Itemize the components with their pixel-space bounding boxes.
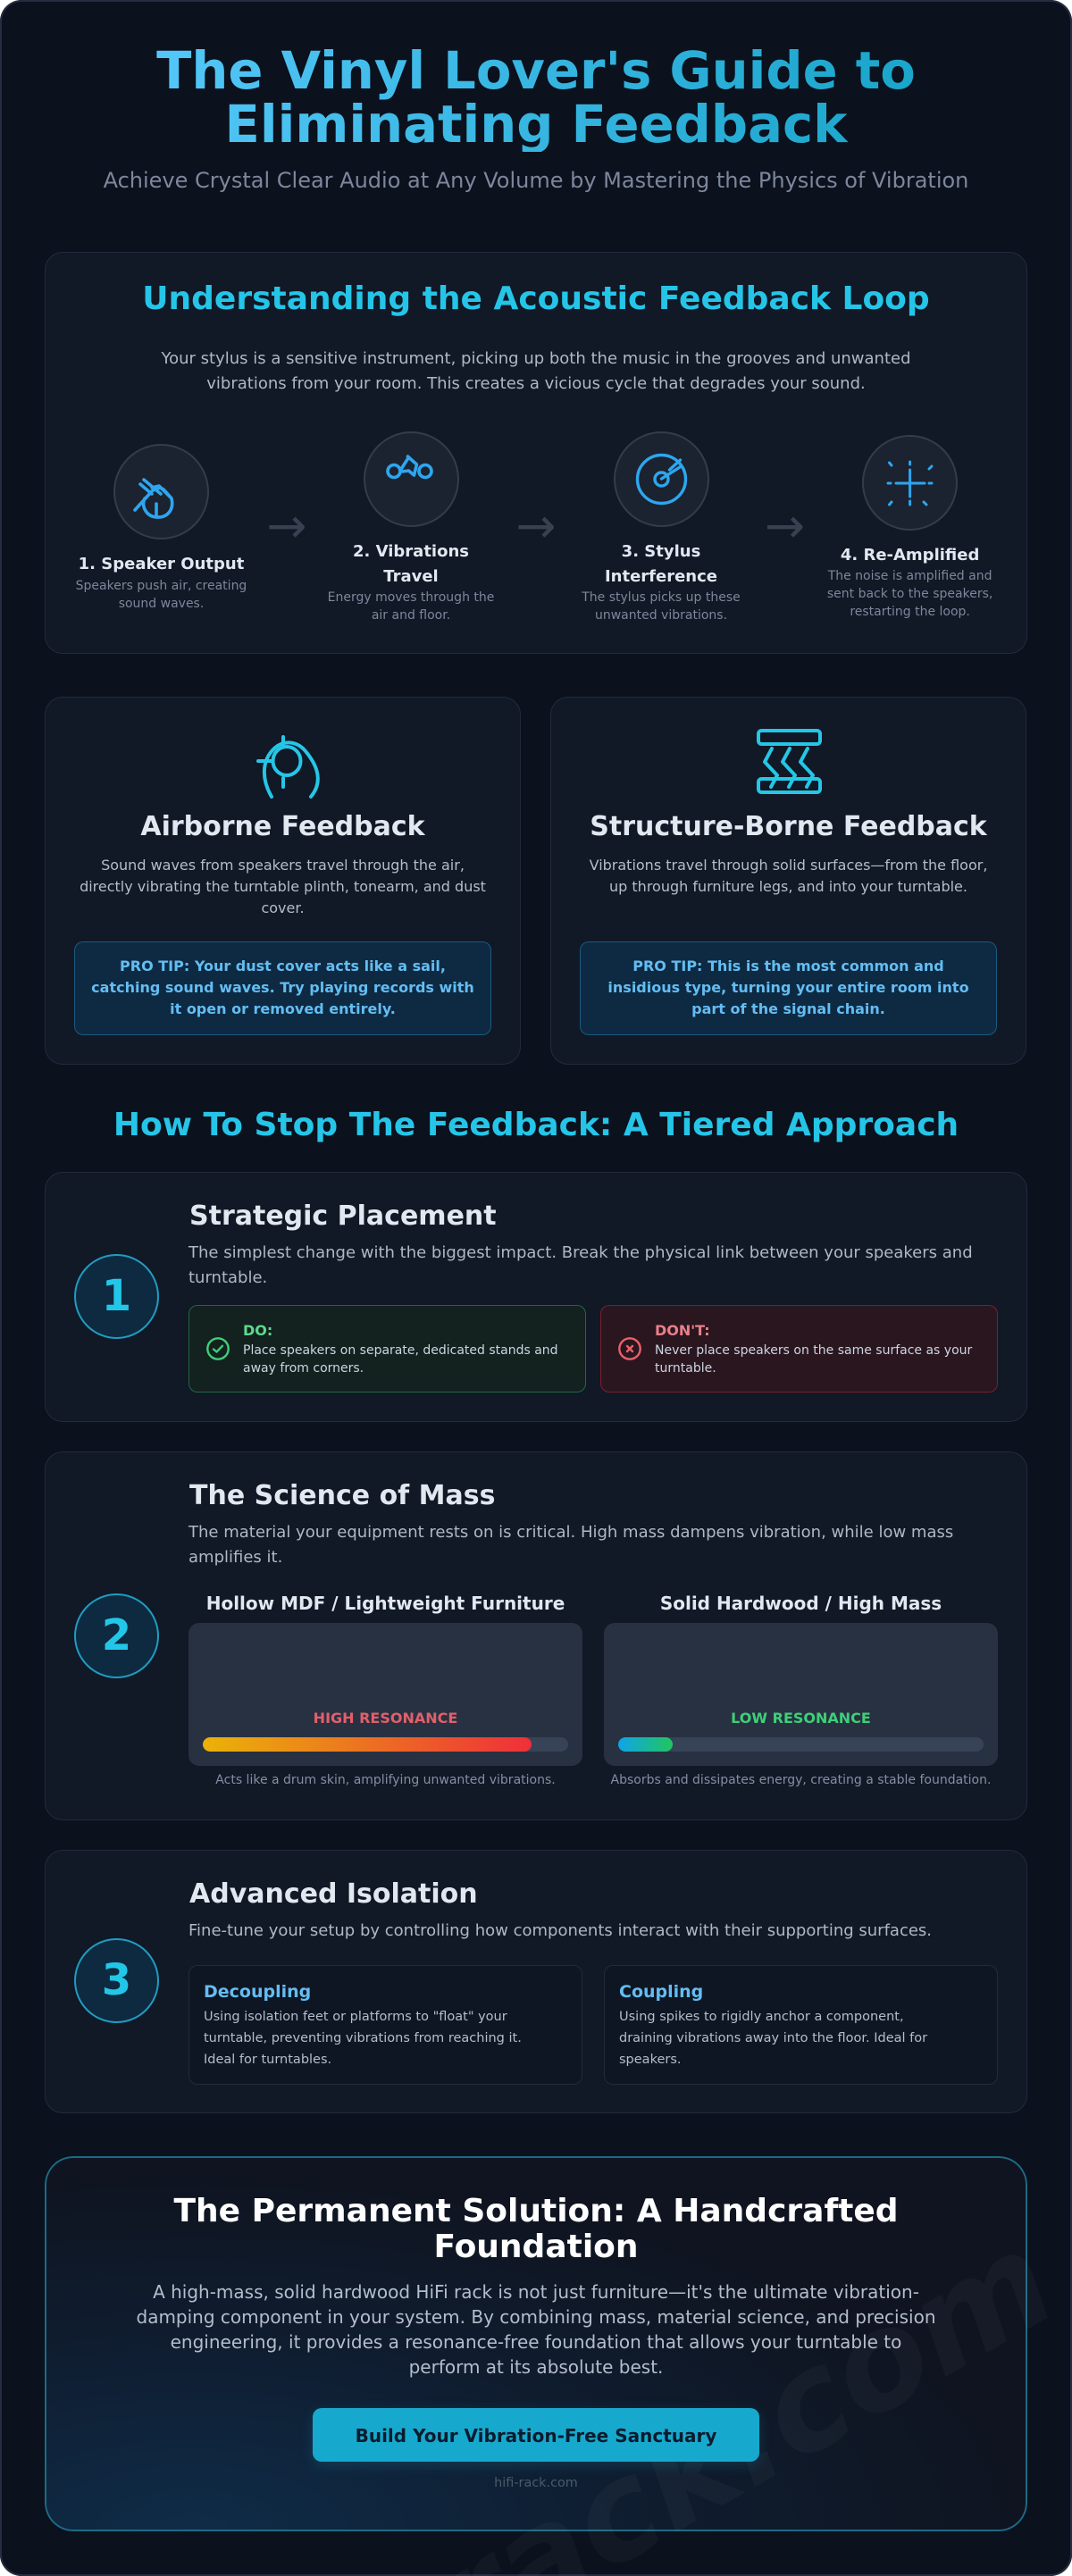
intro text	[161, 349, 911, 393]
pro tip callout: catching sound waves. Try playing records with	[91, 979, 474, 996]
icon: check	[206, 1337, 230, 1360]
do text: Place speakers on separate, dedicated stands and	[243, 1343, 558, 1358]
description: cover.	[261, 899, 305, 916]
pro tip callout: PRO TIP: This is the most common and	[632, 958, 944, 974]
step title: 2. Vibrations	[353, 541, 469, 561]
tier description: The simplest change with the biggest impact. Break the physical link between your speakers and	[188, 1243, 973, 1261]
card: decoupling: Ideal for turntables.	[204, 2053, 331, 2067]
comparison: solid hardwood	[604, 1593, 998, 1787]
icon: airborne waves	[256, 735, 320, 799]
do card	[188, 1305, 586, 1393]
tier number 3	[74, 1938, 159, 2023]
step description	[827, 569, 992, 619]
icon: amplification burst	[886, 461, 933, 506]
step title: Travel	[383, 566, 439, 586]
description: up through furniture legs, and into your turntable.	[609, 877, 967, 895]
tier title: The Science of Mass	[189, 1480, 495, 1511]
comparison: hollow MDF	[188, 1593, 582, 1787]
panel: tier 3 advanced isolation	[45, 1850, 1027, 2113]
panel: tier 1 strategic placement	[45, 1172, 1027, 1422]
step description: The noise is amplified and	[828, 569, 992, 583]
pro tip callout: part of the signal chain.	[691, 1000, 885, 1017]
don't label: DON'T:	[655, 1322, 710, 1338]
section heading: tiered approach: How To Stop The Feedback: A Tiered Approach	[113, 1106, 959, 1143]
tier description: Fine-tune your setup by controlling how components interact with their supporting surfaces.	[188, 1921, 932, 1940]
description	[590, 856, 987, 895]
heading: Foundation	[433, 2228, 639, 2265]
icon: speaker	[133, 478, 173, 519]
arrow 3: →	[765, 498, 805, 554]
step description: unwanted vibrations.	[595, 608, 727, 623]
tier number 1	[74, 1254, 159, 1339]
caption: Absorbs and dissipates energy, creating a stable foundation.	[611, 1773, 991, 1787]
icon: vibrations through structure	[757, 729, 822, 794]
card: coupling: speakers.	[619, 2053, 681, 2067]
card: decoupling: turntable, preventing vibrations from reaching it.	[204, 2031, 522, 2045]
caption: Acts like a drum skin, amplifying unwanted vibrations.	[215, 1773, 556, 1787]
step title: 1. Speaker Output	[79, 554, 244, 573]
step description: restarting the loop.	[850, 605, 970, 619]
do text line 2: away from corners.	[243, 1361, 364, 1376]
body text	[136, 2281, 936, 2378]
card: coupling: draining vibrations away into the floor. Ideal for	[619, 2031, 927, 2045]
panel: call to action	[45, 2156, 1027, 2531]
step title	[605, 541, 717, 586]
card: decoupling: Decoupling	[204, 1981, 311, 2001]
card: coupling: Coupling	[619, 1981, 703, 2001]
step 3: stylus interference	[582, 431, 741, 623]
tier number 1: 1	[102, 1271, 131, 1321]
body text: damping component in your system. By combining mass, material science, and precision	[136, 2306, 936, 2328]
title	[45, 45, 1027, 152]
tier title: Strategic Placement	[189, 1200, 497, 1232]
body text: engineering, it provides a resonance-free foundation that allows your turntable to	[171, 2331, 901, 2353]
heading: Structure-Borne Feedback	[590, 811, 987, 842]
card: coupling: Using spikes to rigidly anchor a component,	[619, 2010, 904, 2024]
heading	[173, 2192, 899, 2265]
panel: airborne feedback	[45, 697, 521, 1065]
tier number 2	[74, 1593, 159, 1678]
arrow 2: →	[515, 498, 557, 554]
step description: sent back to the speakers,	[827, 587, 992, 601]
title: The Vinyl Lover's Guide to	[156, 41, 916, 101]
step description: sound waves.	[119, 597, 204, 611]
tier description: amplifies it.	[188, 1547, 282, 1567]
tier number 3: 3	[102, 1955, 131, 2005]
intro text: vibrations from your room. This creates a vicious cycle that degrades your sound.	[206, 374, 866, 393]
step description	[328, 590, 494, 623]
card: decoupling: Using isolation feet or platforms to "float" your	[204, 2010, 507, 2024]
icon: vibration links	[386, 455, 433, 479]
pro tip callout: insidious type, turning your entire room into	[607, 979, 969, 996]
pro tip callout	[580, 941, 997, 1035]
resonance meter: low: LOW RESONANCE	[731, 1710, 871, 1727]
heading: Airborne Feedback	[140, 811, 425, 842]
pro tip callout: PRO TIP: Your dust cover acts like a sail,	[120, 958, 446, 974]
step 1: speaker output	[76, 444, 247, 611]
step description: The stylus picks up these	[582, 590, 741, 605]
step description	[76, 579, 247, 611]
step description: air and floor.	[372, 608, 450, 623]
site name: hifi-rack.com	[494, 2476, 578, 2490]
tier title: Advanced Isolation	[189, 1878, 478, 1910]
card: decoupling	[188, 1965, 582, 2085]
body text: A high-mass, solid hardwood HiFi rack is not just furniture—it's the ultimate vibration-	[153, 2281, 919, 2303]
do label: DO:	[243, 1322, 272, 1338]
step description	[582, 590, 741, 623]
step 2: vibrations travel	[328, 431, 494, 623]
step description: Speakers push air, creating	[76, 579, 247, 593]
body text: perform at its absolute best.	[409, 2356, 663, 2378]
subtitle: Achieve Crystal Clear Audio at Any Volume by Mastering the Physics of Vibration	[104, 168, 968, 193]
title: Eliminating Feedback	[225, 95, 847, 155]
don't text line 2: turntable.	[655, 1361, 716, 1376]
don't text: Never place speakers on the same surface as your	[655, 1343, 972, 1358]
icon: record and stylus	[636, 454, 688, 506]
pro tip callout: it open or removed entirely.	[170, 1000, 396, 1017]
step title: 3. Stylus	[622, 541, 700, 561]
description: Sound waves from speakers travel through the air,	[101, 856, 465, 874]
column heading: Solid Hardwood / High Mass	[660, 1593, 942, 1614]
tier number 2: 2	[102, 1610, 131, 1660]
heading: feedback loop: Understanding the Acoustic Feedback Loop	[142, 280, 930, 317]
step title: Interference	[605, 566, 717, 586]
resonance meter: high: HIGH RESONANCE	[314, 1710, 457, 1727]
icon: cross	[618, 1337, 641, 1360]
tier description: turntable.	[188, 1268, 267, 1286]
description	[80, 856, 486, 916]
step description: Energy moves through the	[328, 590, 494, 605]
pro tip callout	[74, 941, 491, 1035]
tier description	[188, 1243, 973, 1286]
resonance meter: high	[188, 1623, 582, 1766]
step 4: re-amplified	[827, 435, 992, 619]
heading: The Permanent Solution: A Handcrafted	[173, 2192, 899, 2229]
button	[313, 2408, 759, 2462]
don't card	[600, 1305, 998, 1393]
step title: 4. Re-Amplified	[841, 545, 979, 565]
panel: structure-borne feedback	[550, 697, 1026, 1065]
tier description	[188, 1522, 953, 1567]
description: directly vibrating the turntable plinth, tonearm, and dust	[80, 877, 486, 895]
description: Vibrations travel through solid surfaces—from the floor,	[590, 856, 987, 874]
column heading: Hollow MDF / Lightweight Furniture	[206, 1593, 565, 1614]
card: coupling	[604, 1965, 998, 2085]
arrow 1: →	[266, 498, 307, 554]
button: Build Your Vibration-Free Sanctuary	[356, 2425, 716, 2446]
intro text: Your stylus is a sensitive instrument, picking up both the music in the grooves and unwanted	[161, 349, 911, 368]
panel: acoustic feedback loop	[45, 252, 1027, 654]
step title	[353, 541, 469, 586]
panel: tier 2 science of mass	[45, 1451, 1027, 1820]
resonance meter: low	[604, 1623, 998, 1766]
tier description: The material your equipment rests on is critical. High mass dampens vibration, while low mass	[188, 1522, 953, 1542]
